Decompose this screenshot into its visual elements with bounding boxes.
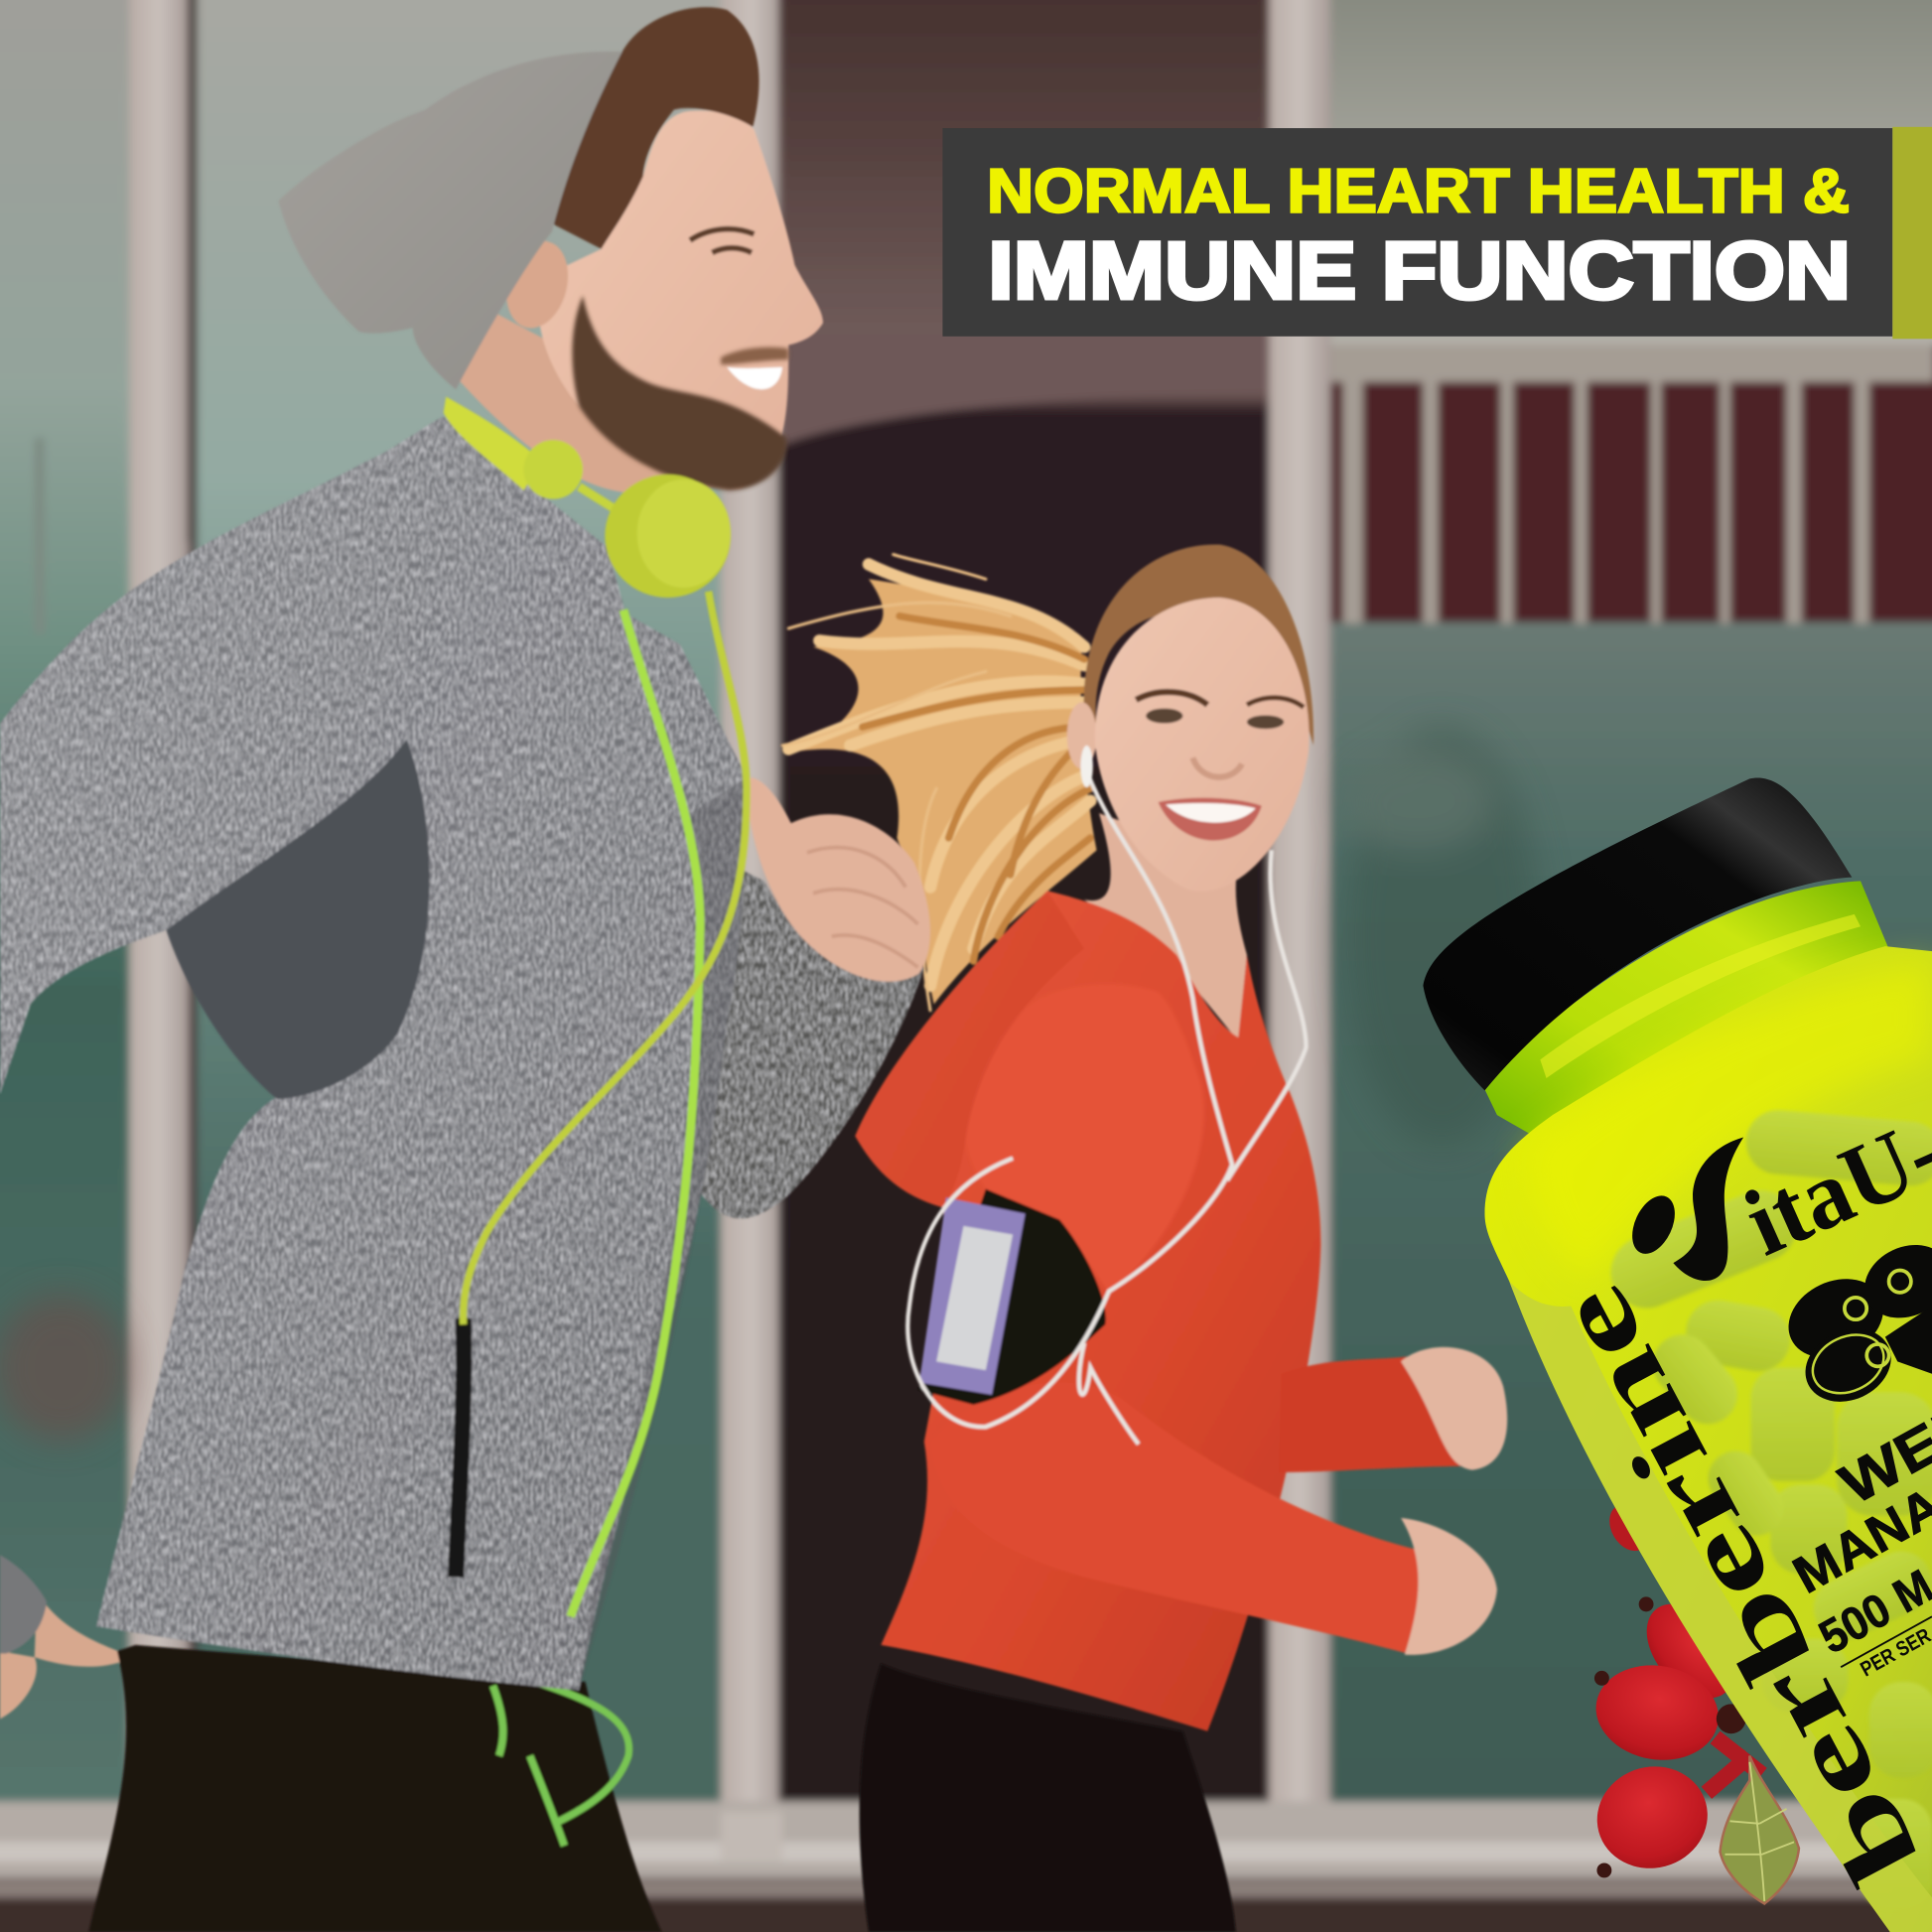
- neck: [1084, 813, 1247, 1041]
- face: [1095, 598, 1310, 892]
- leaf: [1721, 1756, 1799, 1903]
- brand dot: [1624, 1189, 1684, 1261]
- berry: [1629, 1587, 1751, 1715]
- ear: [497, 234, 577, 336]
- banner accent bar: [1892, 127, 1932, 339]
- berry: [1588, 1656, 1726, 1769]
- hair ponytail: [782, 554, 1097, 1011]
- bottle cap: [1423, 778, 1852, 1090]
- jacket hood shade: [855, 891, 1084, 1207]
- jacket zip: [571, 610, 700, 1616]
- bottle neck highlight: [1540, 914, 1861, 1078]
- hoodie torso and arm: [0, 416, 747, 1691]
- hair: [553, 7, 759, 249]
- jacket sleeve shoulder: [966, 984, 1204, 1294]
- product bottle: [1423, 778, 1932, 1932]
- berry: [1586, 1754, 1719, 1880]
- jacket: [855, 891, 1320, 1731]
- woman runner: [782, 544, 1507, 1932]
- earbud: [1080, 746, 1093, 787]
- front arm sleeve: [930, 1382, 1430, 1654]
- berry logo: [1775, 1231, 1932, 1415]
- beanie: [278, 52, 622, 389]
- earphone wires: [907, 763, 1307, 1445]
- hoodie mesh panel: [167, 740, 430, 1099]
- facial features: [1136, 692, 1304, 841]
- label divider: [1841, 1616, 1932, 1667]
- brand swoosh: [1673, 1138, 1743, 1281]
- hand: [745, 777, 930, 982]
- pocket zip: [456, 1318, 464, 1578]
- man runner: [0, 7, 930, 1932]
- bottle edge frost: [1509, 1282, 1932, 1932]
- eye and brow: [690, 229, 755, 252]
- lower fist: [1401, 1518, 1497, 1655]
- banner heading line one: NORMAL HEART HEALTH &: [987, 157, 1850, 225]
- face: [538, 110, 823, 489]
- rear hand: [0, 1591, 133, 1719]
- pants: [88, 1645, 661, 1932]
- capsules inside: [1600, 1107, 1932, 1910]
- bright shoulder: [1528, 961, 1932, 1282]
- banner panel: [942, 128, 1892, 337]
- neck: [459, 302, 727, 492]
- rear sleeve cuff: [0, 1555, 47, 1654]
- berry: [1601, 1498, 1656, 1558]
- smile: [727, 367, 782, 389]
- back forearm: [1279, 1355, 1462, 1472]
- hair cap: [1084, 544, 1313, 746]
- stems: [1707, 1737, 1762, 1793]
- upper fist: [1401, 1347, 1507, 1470]
- pants: [860, 1663, 1236, 1932]
- moustache: [721, 347, 788, 364]
- headphones: [444, 397, 731, 598]
- headphone cord: [463, 592, 747, 1324]
- hoodie side shade: [579, 777, 747, 1691]
- banner: [942, 127, 1932, 339]
- berries and leaf: [1586, 1498, 1799, 1903]
- beard: [572, 296, 786, 490]
- forearm sleeve: [690, 863, 924, 1218]
- armband: [918, 1189, 1106, 1405]
- drawstring cords: [492, 1682, 629, 1846]
- banner heading line two: IMMUNE FUNCTION: [988, 225, 1851, 316]
- bottle body: [1484, 946, 1932, 1932]
- brand mark: [1624, 1138, 1743, 1281]
- bottle neck: [1482, 881, 1891, 1140]
- calyx tips: [1594, 1596, 1746, 1877]
- ear: [1067, 702, 1097, 768]
